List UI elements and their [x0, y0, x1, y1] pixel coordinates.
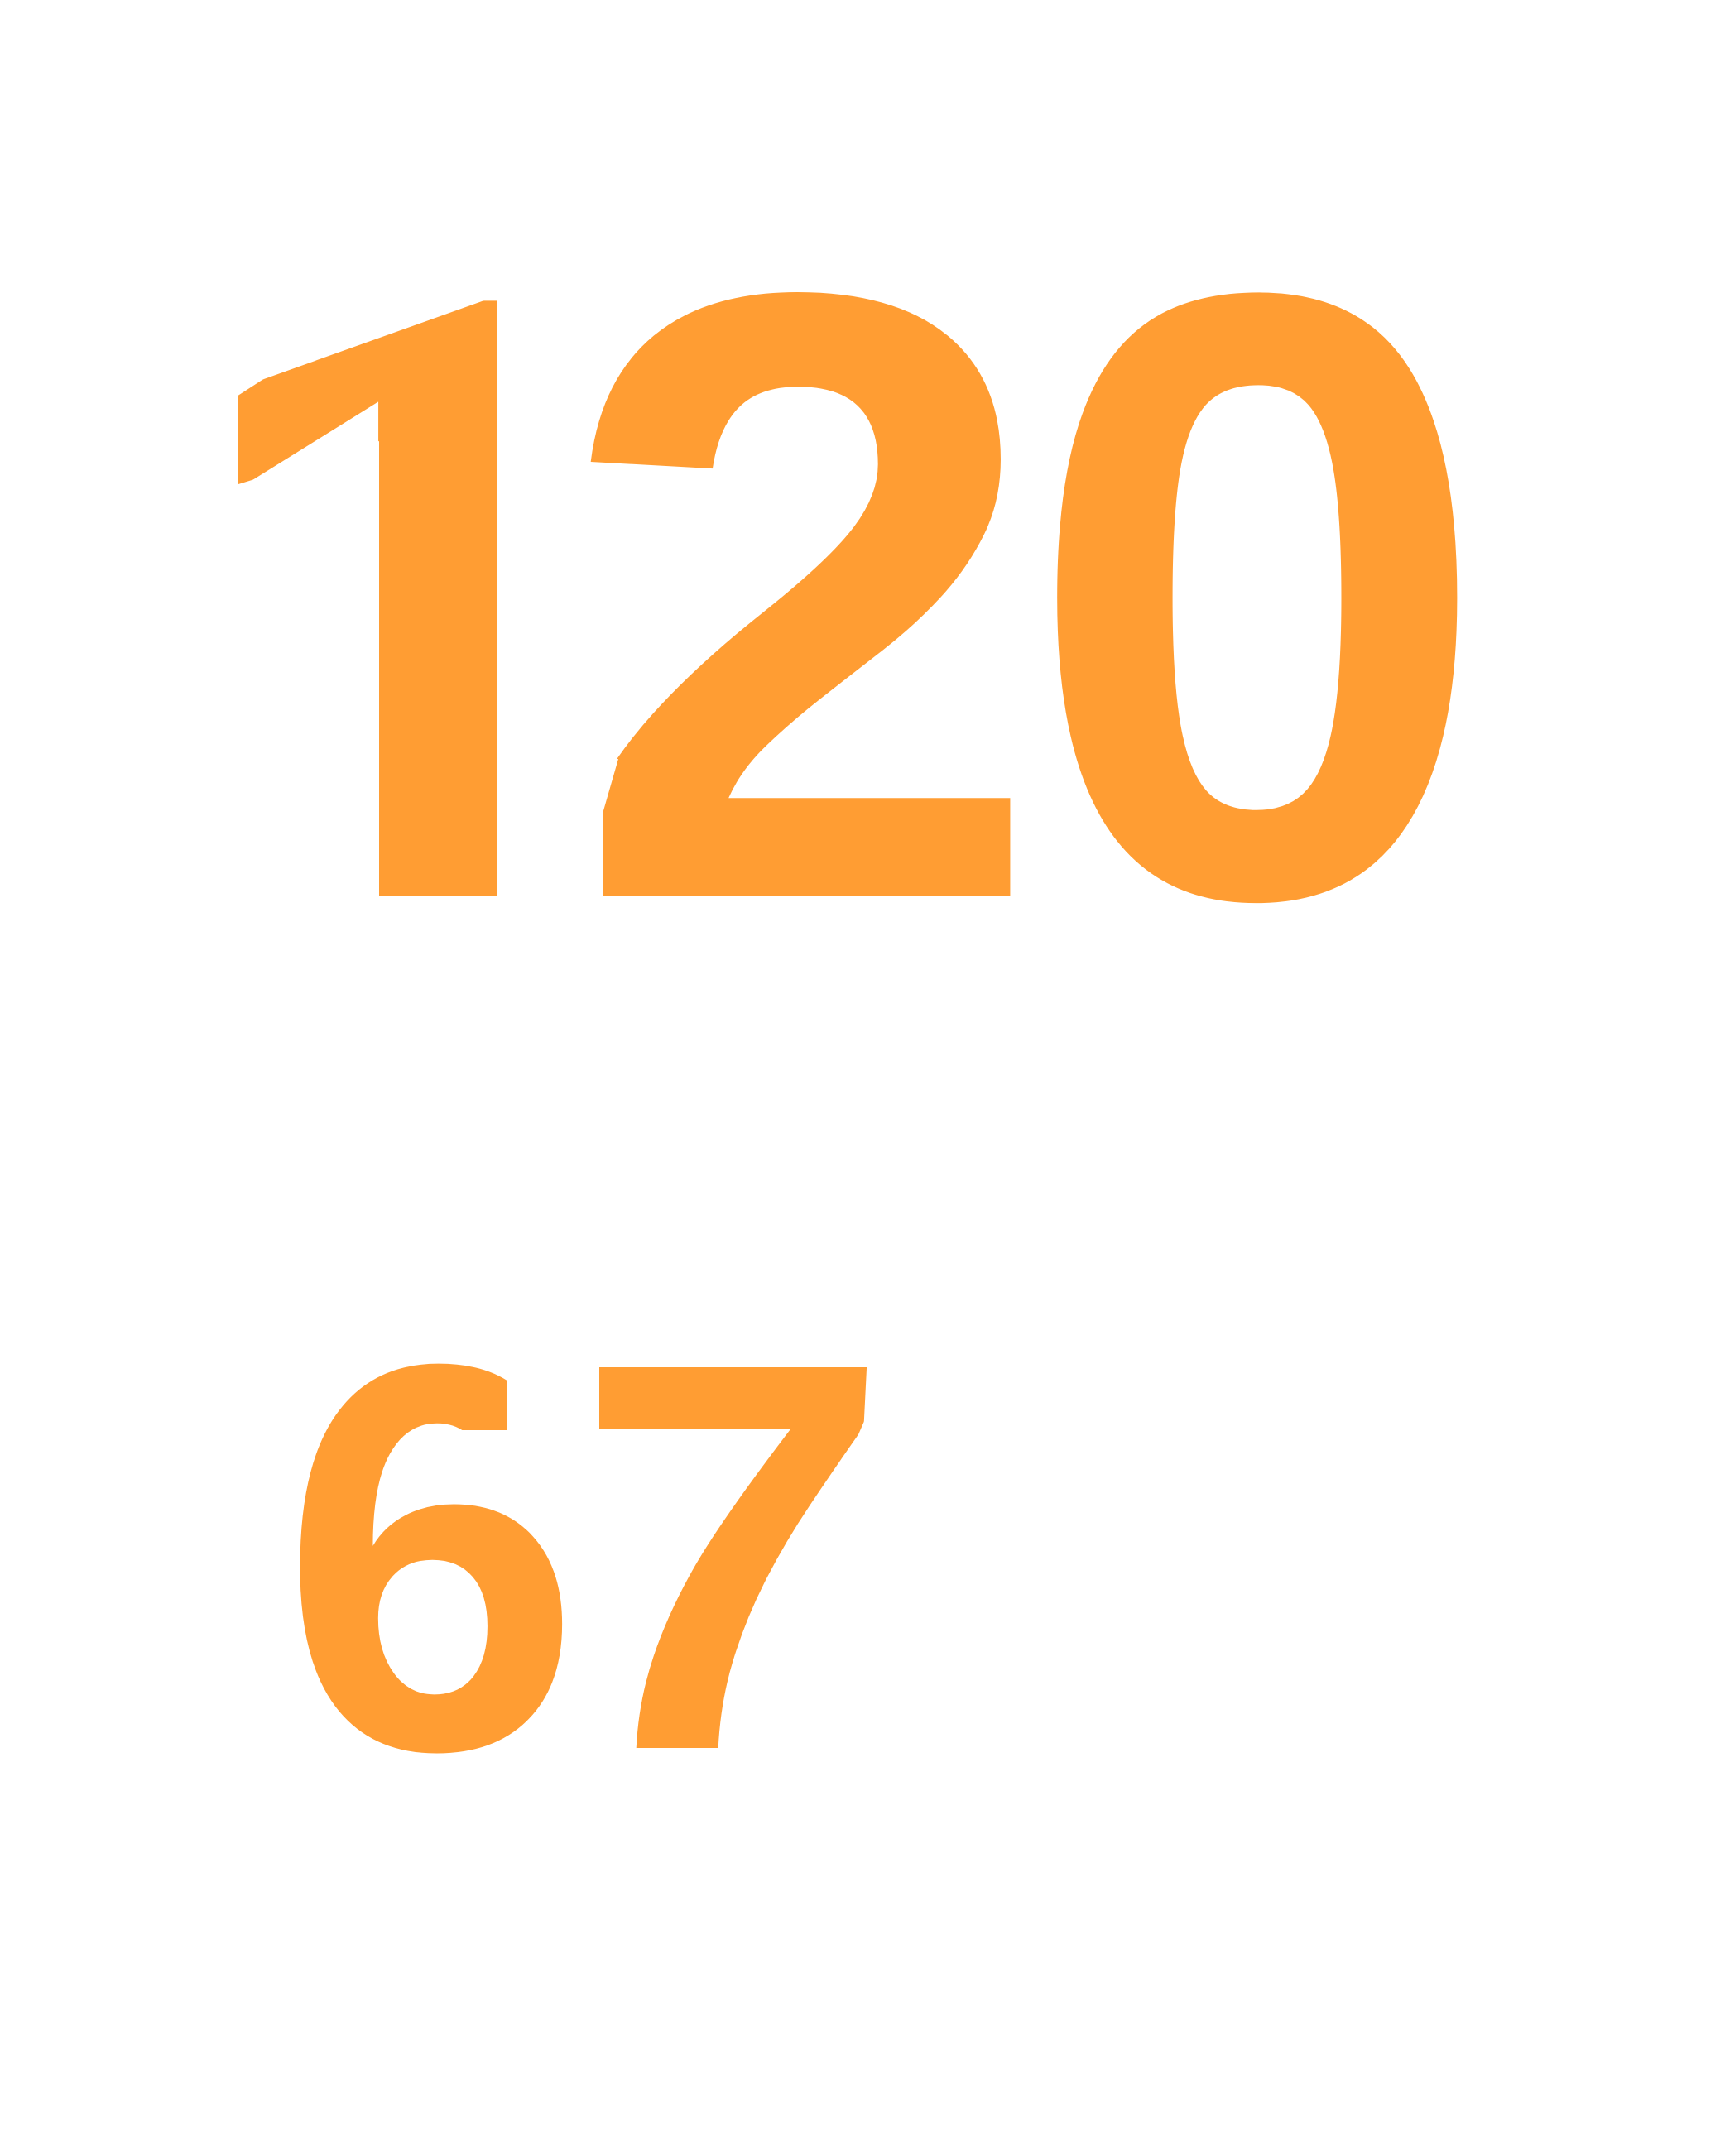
number: 67: [300, 1364, 867, 1753]
digit 6: 6: [280, 1250, 582, 1865]
number: 120: [238, 292, 1457, 904]
digit 0: 0: [1024, 114, 1492, 1078]
digit 1: 1: [175, 113, 659, 1081]
digit 2: 2: [555, 113, 1045, 1079]
digit 7: 7: [549, 1246, 898, 1866]
